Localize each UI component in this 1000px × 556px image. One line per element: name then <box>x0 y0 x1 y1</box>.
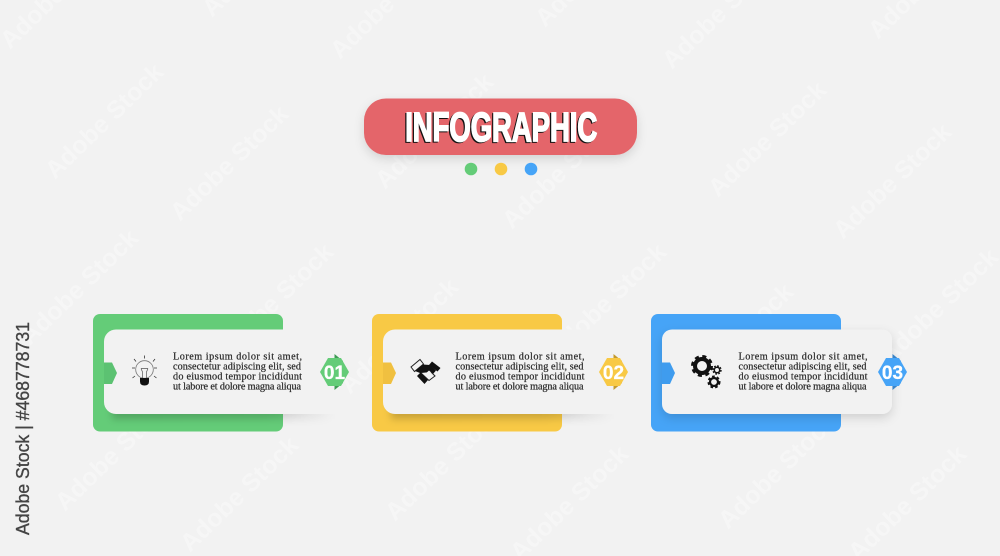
body text: consectetur adipiscing elit, sed <box>456 362 584 372</box>
watermark pattern: Adobe Stock <box>543 238 672 364</box>
body text: do eiusmod tempor incididunt <box>173 372 302 383</box>
title text: INFOGRAPHIC <box>405 104 597 150</box>
title text: INFOGRAPHIC <box>404 105 596 151</box>
number badge 01: 01 <box>324 363 345 384</box>
tab arrow <box>383 362 396 384</box>
body text: consectetur adipiscing elit, sed <box>173 362 301 372</box>
watermark pattern: Adobe Stock <box>50 390 179 516</box>
watermark pattern: Adobe Stock <box>165 100 294 226</box>
body text: ut labore et dolore magna aliqua <box>173 382 301 393</box>
panel: step 01 <box>93 314 349 432</box>
blue backing card <box>651 314 841 432</box>
pagination dots <box>465 163 537 175</box>
body text <box>738 352 868 393</box>
body text: Lorem ipsum dolor sit amet, <box>738 352 868 362</box>
watermark pattern: Adobe Stock <box>497 108 626 234</box>
green backing card <box>93 314 283 432</box>
body text: Lorem ipsum dolor sit amet, <box>456 352 584 362</box>
watermark pattern: Adobe Stock <box>828 118 957 244</box>
white card <box>662 330 892 414</box>
number badge 03: 03 <box>882 363 903 384</box>
body text: ut labore et dolore magna aliqua <box>456 382 584 393</box>
white card <box>104 330 336 414</box>
watermark pattern: Adobe Stock <box>670 278 799 404</box>
body text <box>173 352 302 393</box>
body text: do eiusmod tempor incididunt <box>738 372 868 383</box>
title text <box>404 104 597 151</box>
card shadow <box>112 405 334 419</box>
panel: step 02 <box>372 314 628 432</box>
number badge 03 <box>878 354 907 390</box>
tab arrow <box>662 362 675 384</box>
watermark pattern: Adobe Stock <box>210 238 339 364</box>
watermark pattern: Adobe Stock <box>370 68 499 194</box>
body text: do eiusmod tempor incididunt <box>456 372 585 383</box>
stock id side text: Adobe Stock | #468778731 <box>13 322 33 535</box>
watermark pattern: Adobe Stock <box>713 408 842 534</box>
body text: consectetur adipiscing elit, sed <box>738 362 866 372</box>
watermark pattern: Adobe Stock <box>703 76 832 202</box>
watermark pattern: Adobe Stock <box>380 400 509 526</box>
card shadow <box>391 405 613 419</box>
number badge 01 <box>320 354 349 390</box>
body text: Lorem ipsum dolor sit amet, <box>173 352 302 362</box>
watermark pattern: Adobe Stock <box>175 431 304 556</box>
number badge 02: 02 <box>603 363 624 384</box>
number badge 02 <box>599 354 628 390</box>
watermark pattern: Adobe Stock <box>15 224 144 350</box>
body text: ut labore et dolore magna aliqua <box>738 382 867 393</box>
body text <box>456 352 585 393</box>
watermark pattern: Adobe Stock <box>335 273 464 399</box>
panel: step 03 <box>651 314 907 432</box>
watermark pattern: Adobe Stock <box>40 58 169 184</box>
icon: gears <box>692 356 721 388</box>
title banner <box>364 98 637 155</box>
icon: light bulb <box>132 356 157 386</box>
tab arrow <box>104 362 117 384</box>
icon: handshake <box>411 360 440 384</box>
yellow backing card <box>372 314 562 432</box>
white card <box>383 330 615 414</box>
